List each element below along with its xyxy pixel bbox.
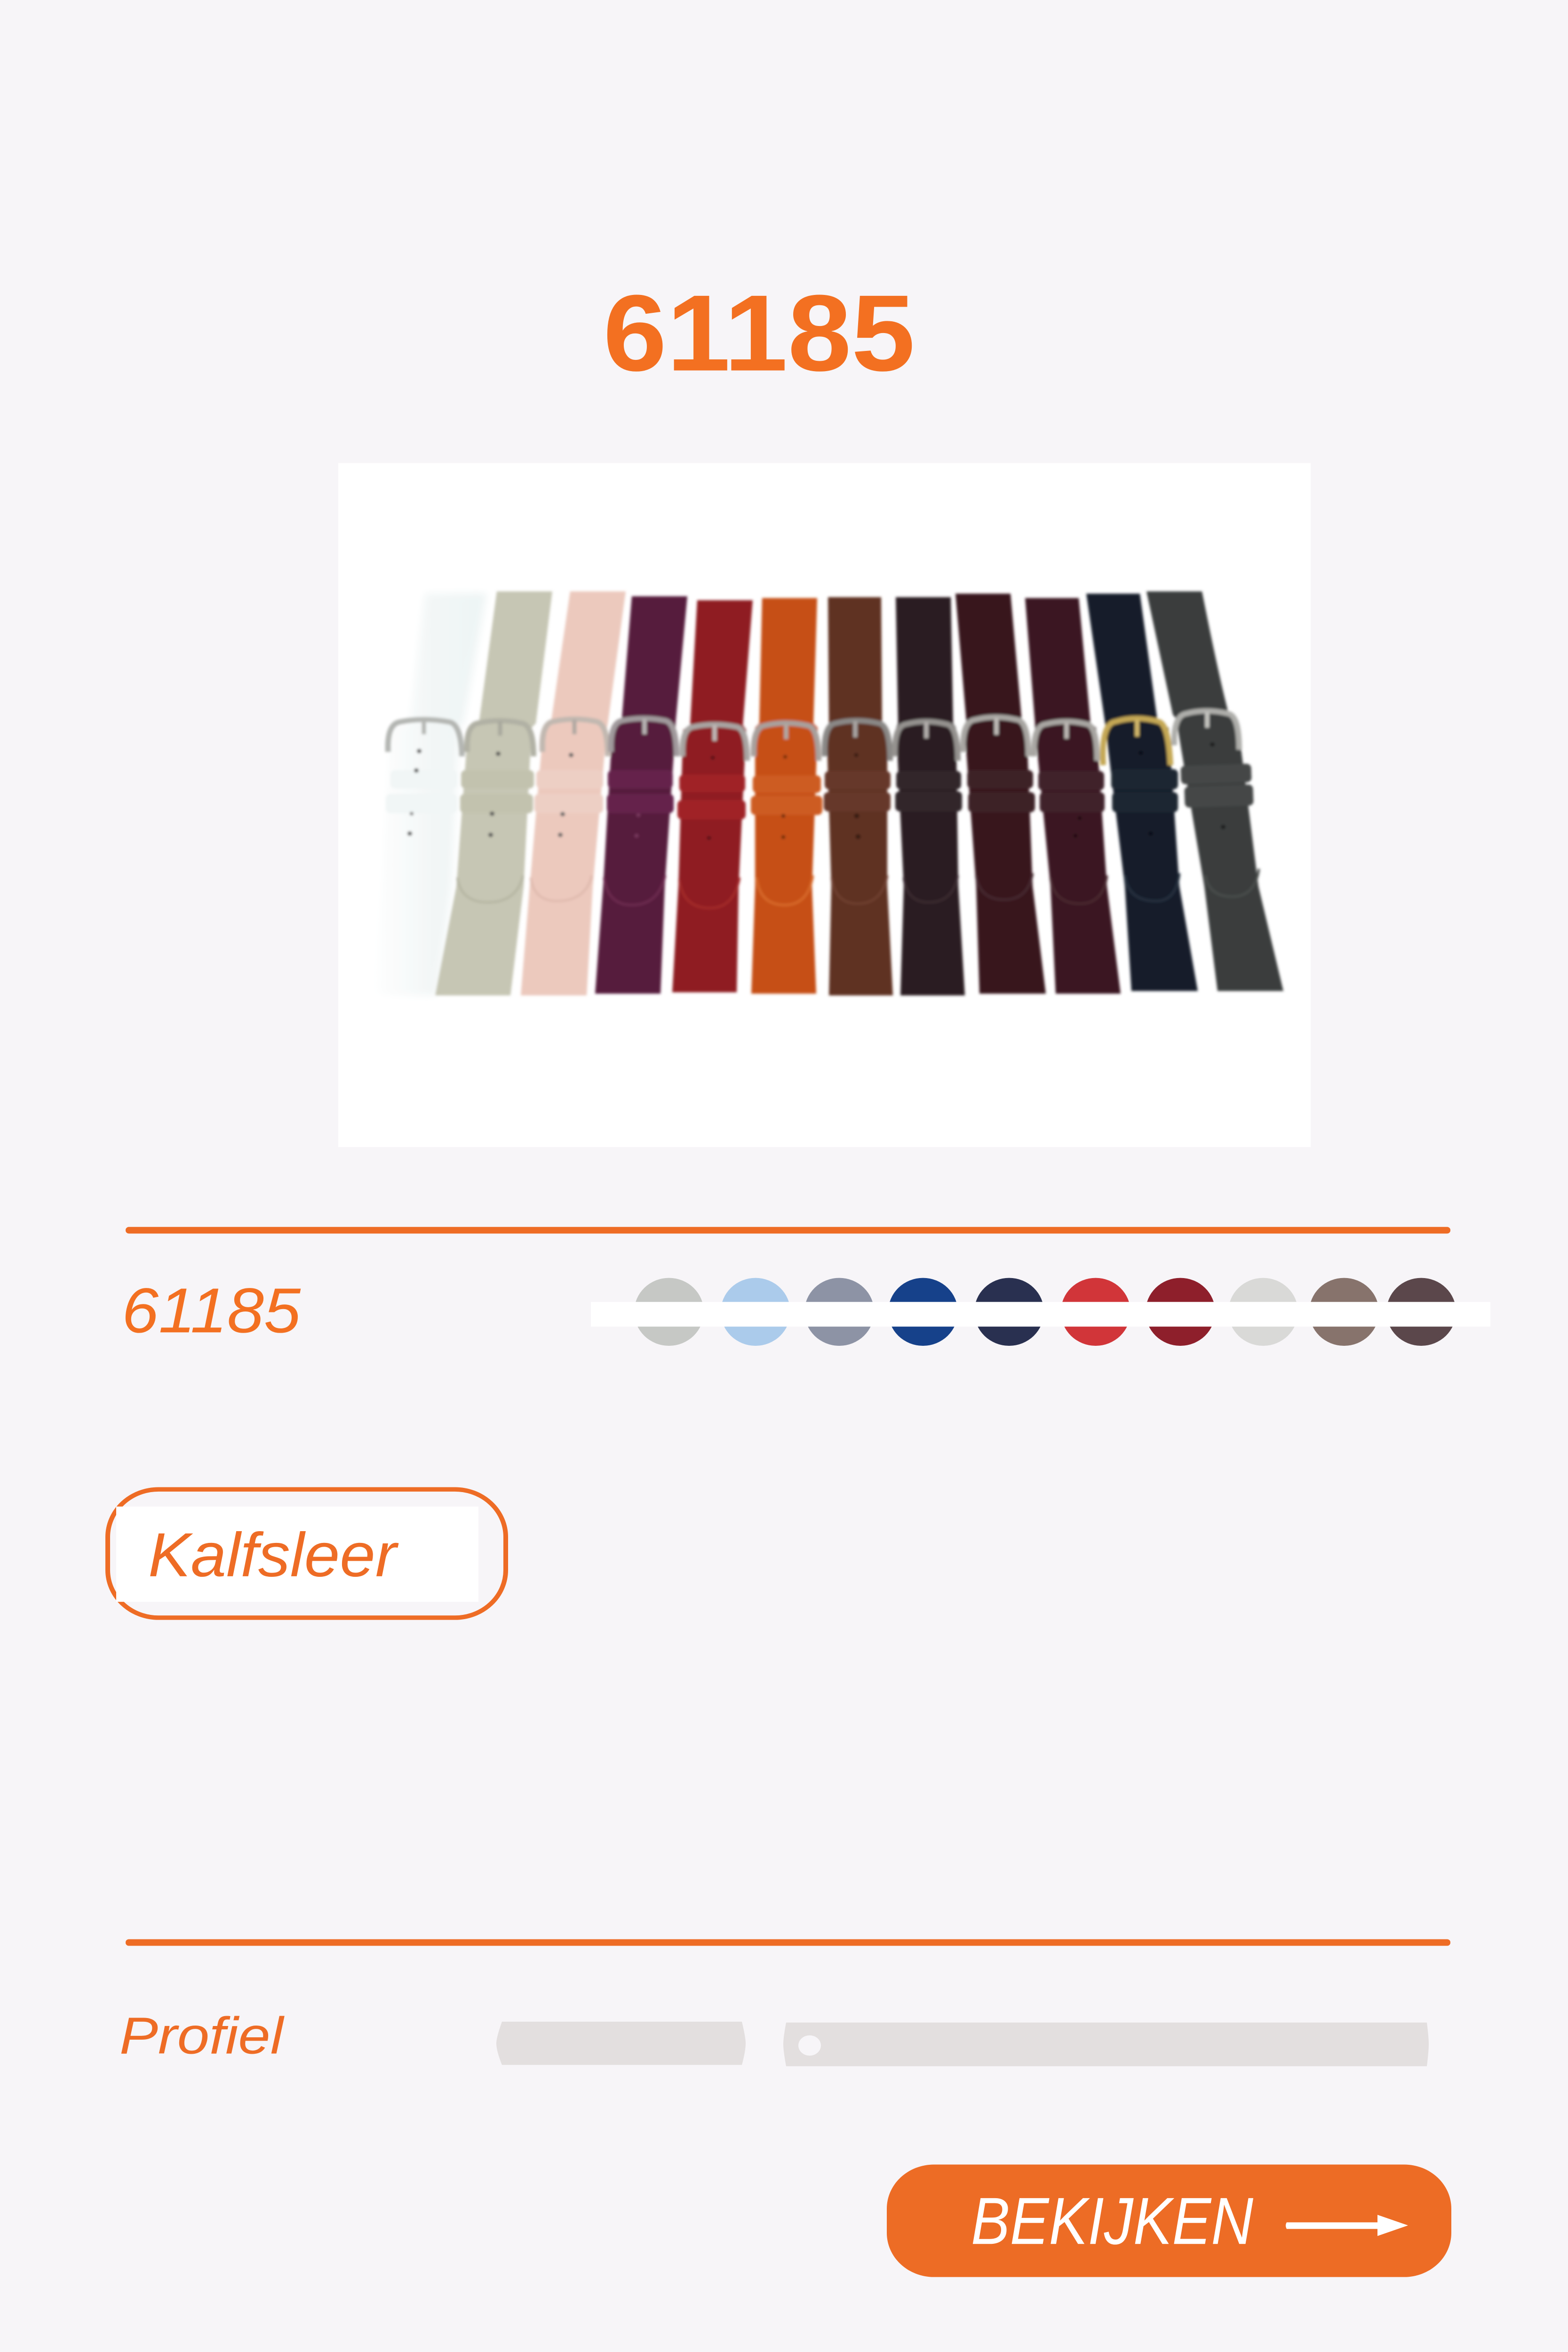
strap: navy with gold buckle: [1086, 594, 1198, 991]
strap: pink: [521, 591, 626, 995]
colour swatches: [591, 1278, 1490, 1346]
strap: dark brown: [895, 597, 965, 995]
strap: red: [672, 600, 753, 993]
button: BEKIJKEN: BEKIJKEN: [971, 2185, 1253, 2258]
strap: chocolate: [955, 594, 1046, 993]
strap: orange: [751, 598, 822, 993]
product photo: watch straps: [338, 463, 1311, 1147]
profile bar: short: [496, 2022, 746, 2065]
divider: bottom rule: [126, 1939, 1450, 1946]
divider: top rule: [126, 1227, 1450, 1233]
strap: white: [371, 593, 486, 995]
material pill: Kalfsleer: [108, 1489, 506, 1618]
button: BEKIJKEN: [887, 2165, 1451, 2277]
strap: beige: [435, 591, 552, 995]
white band over swatches: [591, 1302, 1490, 1327]
profile label: Profiel: [119, 2007, 285, 2065]
title: 61185: [603, 272, 915, 394]
icon: arrow: [1286, 2215, 1408, 2236]
strap: aubergine: [1025, 598, 1121, 993]
strap: brown: [824, 597, 893, 995]
profile bar: long with dot: [783, 2023, 1429, 2066]
product code label: 61185: [122, 1275, 301, 1346]
strap: dark grey: [1146, 591, 1283, 991]
strap: purple: [595, 596, 687, 993]
material pill: Kalfsleer: Kalfsleer: [148, 1520, 399, 1589]
